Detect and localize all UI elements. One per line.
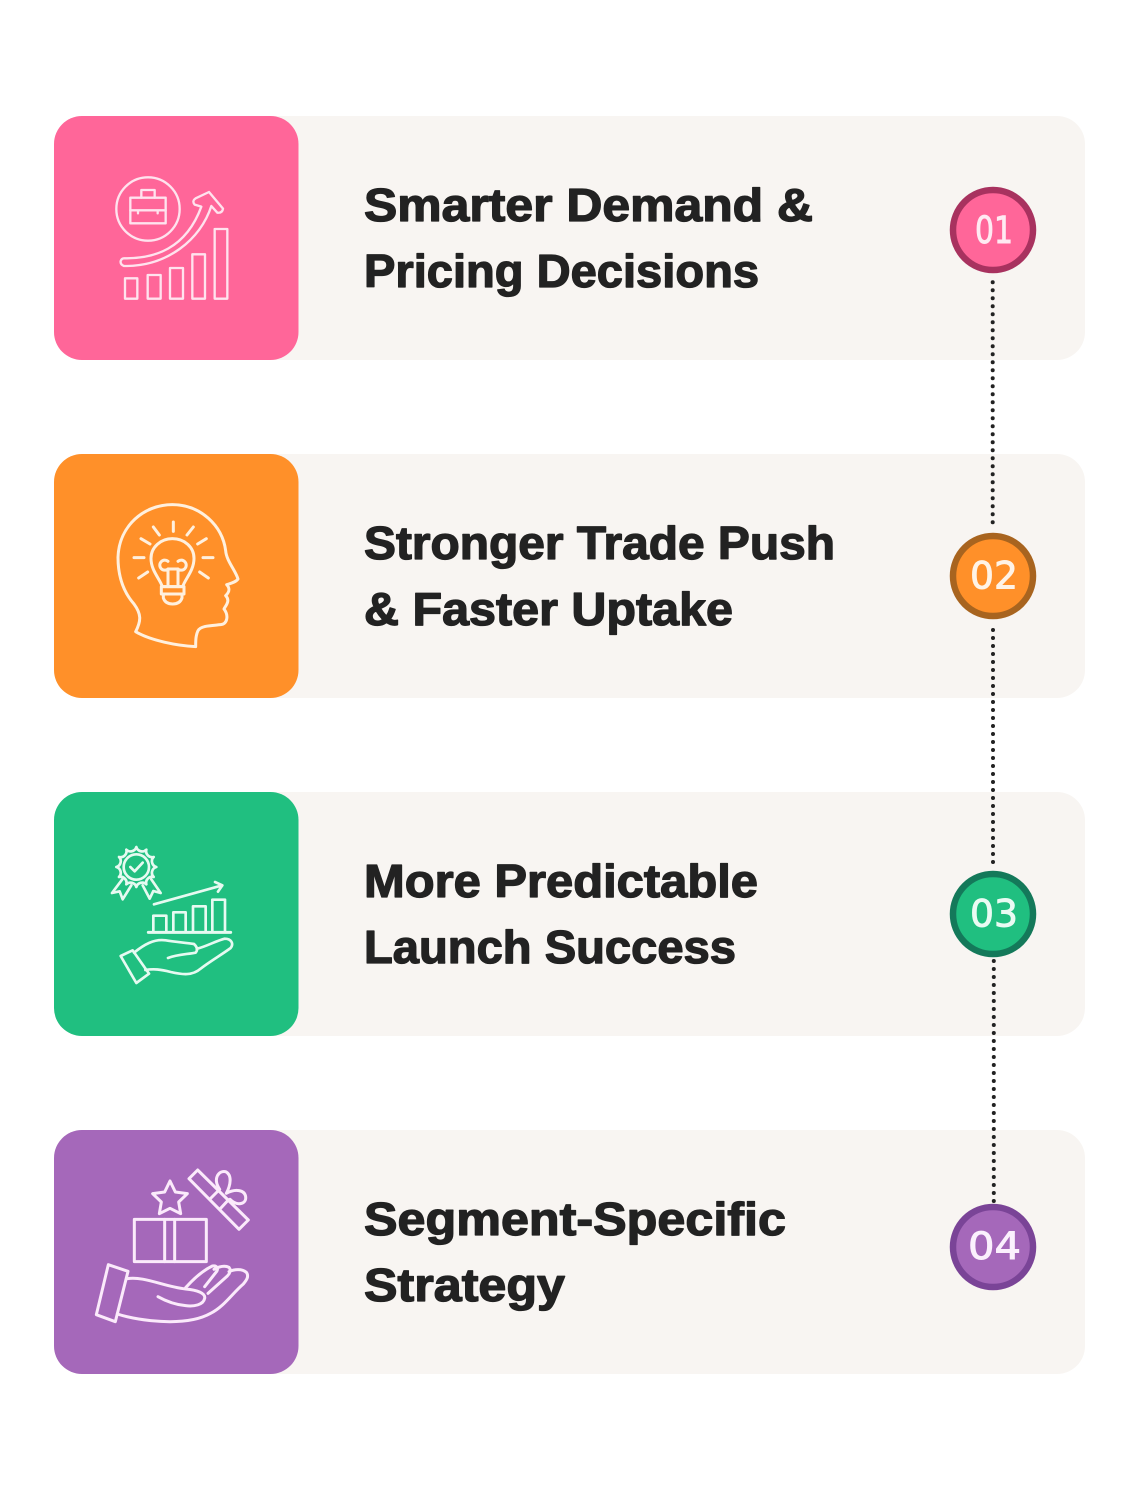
icon: head with light bulb: [118, 505, 238, 647]
number badge 01: [953, 190, 1033, 270]
heading 3: [364, 855, 758, 973]
dotted connector timeline: [993, 282, 994, 1203]
heading 1: Pricing Decisions: [364, 245, 759, 297]
number badge 04: [953, 1207, 1033, 1287]
number badge 03: [953, 874, 1033, 954]
panel: stronger trade push and faster uptake: [54, 454, 1085, 698]
panel background 1: [54, 116, 1085, 360]
number badge 01: 01: [975, 209, 1013, 252]
panel background 3: [54, 792, 1085, 1036]
heading 4: Strategy: [364, 1259, 565, 1311]
panel: segment-specific strategy: [54, 1130, 1085, 1374]
purple icon tile: [54, 1130, 298, 1374]
icon: award, bar chart and open hand: [112, 847, 232, 983]
number badge 04: 04: [968, 1225, 1021, 1268]
heading 1: Smarter Demand &: [364, 179, 813, 231]
heading 3: More Predictable: [364, 855, 758, 907]
orange icon tile: [54, 454, 298, 698]
heading 4: [364, 1193, 786, 1311]
panel: more predictable launch success: [54, 792, 1085, 1036]
heading 4: Segment-Specific: [364, 1193, 786, 1245]
pink icon tile: [54, 116, 298, 360]
number badge 02: [953, 536, 1033, 616]
icon: briefcase and rising bar chart: [116, 177, 227, 299]
heading 2: & Faster Uptake: [364, 583, 733, 635]
heading 3: Launch Success: [364, 921, 736, 973]
heading 2: [364, 517, 835, 635]
icon: gift box and star above open hand: [96, 1170, 248, 1322]
panel: smarter demand and pricing decisions: [54, 116, 1085, 360]
panel background 2: [54, 454, 1085, 698]
panel background 4: [54, 1130, 1085, 1374]
heading 1: [364, 179, 813, 297]
number badge 03: 03: [970, 892, 1018, 936]
number badge 02: 02: [970, 554, 1018, 598]
heading 2: Stronger Trade Push: [364, 517, 835, 569]
green icon tile: [54, 792, 298, 1036]
